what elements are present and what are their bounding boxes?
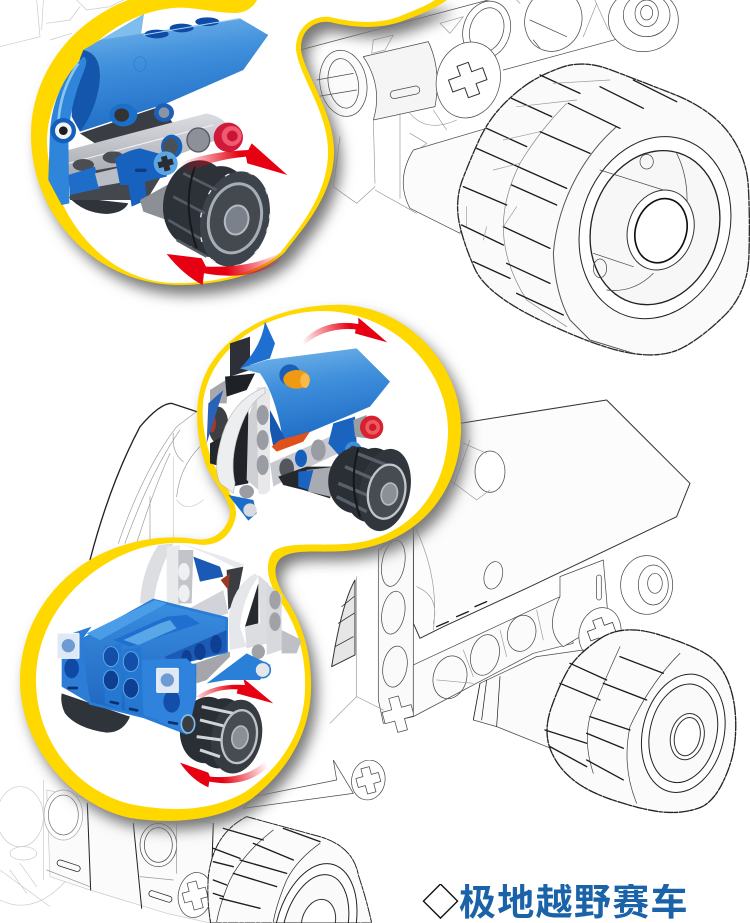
arrow: bottom red: [180, 760, 268, 787]
toy: lower detail, front view: [57, 543, 302, 787]
rear wheel: [61, 693, 130, 733]
panel: upper yellow-rimmed callout: [31, 0, 447, 285]
arrow: top red: [197, 678, 273, 703]
beam: [300, 0, 620, 70]
tread: [208, 817, 372, 923]
blue cone pin: [228, 495, 257, 521]
dark arch interior: [332, 580, 355, 667]
underside sockets: [109, 103, 174, 126]
wheel face: [276, 864, 357, 923]
grey axle cylinder: [140, 183, 170, 220]
red knob: [353, 415, 383, 439]
upper right pin: [243, 757, 388, 808]
grey beam: [68, 113, 230, 175]
axle: [68, 148, 178, 207]
knob outline: [621, 556, 673, 614]
sketch: upper large wheel and beam: [301, 0, 750, 356]
toy: upper detail, front wheel and wing: [48, 14, 287, 285]
chassis: [44, 790, 213, 923]
dark gears and arch interior: [207, 337, 255, 487]
center holes: [103, 643, 122, 710]
clear studs: [57, 633, 178, 692]
horizontal beam: [413, 597, 573, 717]
sketch: bottom chassis and wheel: [0, 2, 450, 923]
arrow: bottom red: [167, 252, 282, 285]
wing: [240, 348, 390, 452]
lower beam: [270, 437, 338, 487]
faded left end: [0, 780, 67, 907]
fin: [240, 322, 275, 368]
body panel: [413, 400, 690, 638]
axle of lower wheel: [473, 650, 583, 753]
blue block: [62, 600, 227, 733]
connector cylinder: [315, 42, 437, 120]
axle: [278, 467, 337, 498]
sketch: lower vehicle body and beams: [330, 400, 736, 812]
axle cylinder: [403, 128, 487, 233]
left plate: [62, 627, 92, 703]
cross pin: [175, 870, 215, 920]
wing: [72, 17, 268, 132]
axle pin: [428, 35, 509, 125]
blue post: [328, 417, 362, 458]
sketch: top-left faint lines: [0, 0, 123, 47]
underside dark: [80, 107, 173, 147]
arrow: top red: [180, 143, 287, 175]
sketch: upper-neighbour dark wheel fragments: [298, 0, 432, 15]
shadow: lower blobs: [26, 314, 467, 830]
small orange pin outline: [450, 440, 505, 500]
orange pin: [279, 364, 310, 389]
tread: [458, 64, 749, 355]
arrow: red top: [302, 318, 387, 344]
vertical bracket: [333, 113, 427, 213]
sketch: left arch of the lower vehicle: [90, 403, 203, 560]
wheel: [156, 155, 280, 274]
cone: [207, 653, 271, 683]
wheel face: [556, 117, 750, 339]
front wheel: [176, 693, 269, 778]
dark chassis under beam: [68, 157, 173, 200]
tread: [545, 630, 736, 812]
red knob outline: [608, 0, 678, 52]
post and pin: [552, 560, 627, 664]
wheel: [324, 443, 418, 536]
white arch and vertical beam: [217, 387, 270, 498]
shadow: upper blob: [38, 10, 454, 295]
wheel face: [630, 666, 736, 801]
toy: middle detail, side view: [207, 318, 418, 536]
right plate: [142, 658, 195, 733]
arm: [48, 57, 86, 205]
vertical beam: [378, 523, 417, 735]
under beam: [195, 652, 230, 683]
arches and rear frame: [140, 543, 302, 659]
rear wheel: [68, 197, 128, 214]
red knob: [214, 123, 243, 152]
panel: lower yellow-rimmed callouts: [20, 305, 461, 821]
wing fin: [100, 14, 144, 47]
